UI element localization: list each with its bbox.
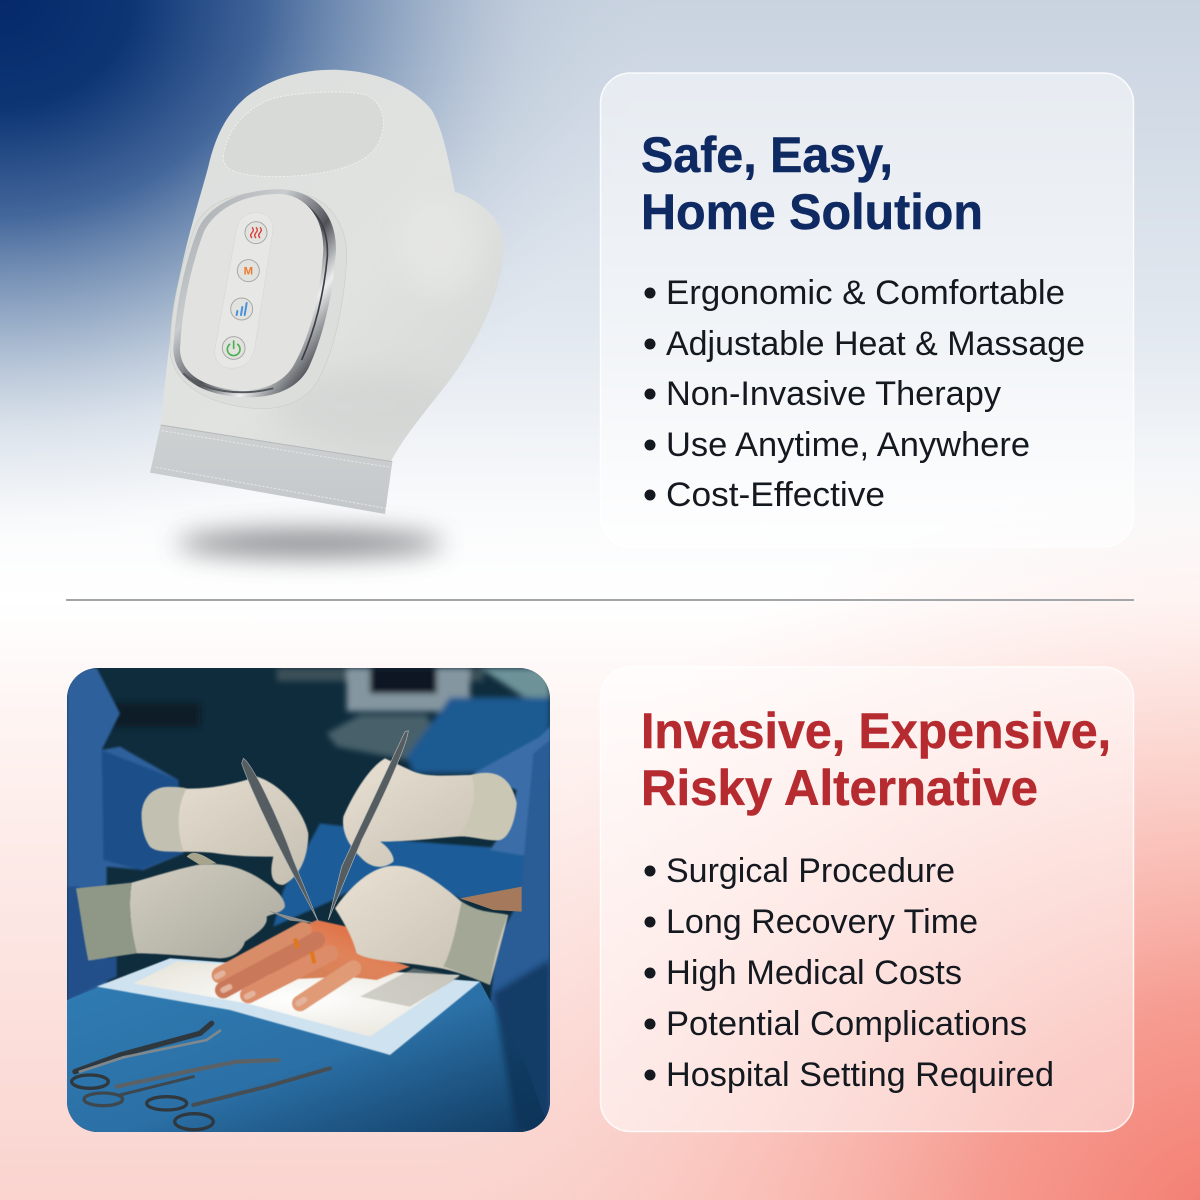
patient hand [217, 920, 410, 1003]
sterile pad [97, 958, 480, 1055]
drawbacks list: Hospital Setting Required [666, 1056, 1054, 1094]
panel: invasive surgery alternative [600, 667, 1134, 1132]
control panel face [180, 194, 323, 390]
upper right hand glove [343, 758, 517, 867]
heading: safe home solution: Safe, Easy, [641, 127, 893, 183]
drawbacks list: Surgical Procedure [666, 852, 955, 890]
benefits list [644, 274, 1085, 514]
control panel housing [170, 192, 347, 409]
patient forearm [460, 887, 522, 912]
panel: safe home solution [600, 73, 1134, 547]
chrome ring [173, 189, 336, 397]
button: mode: M [244, 266, 253, 278]
photo: hand surgery [67, 668, 550, 1132]
drawbacks list [644, 852, 1054, 1094]
button strip [215, 213, 273, 368]
benefits list: Cost-Effective [666, 476, 885, 514]
button: power [222, 337, 245, 359]
heading: invasive alternative: Risky Alternative [641, 760, 1038, 816]
wrist cuff [150, 425, 392, 514]
divider line [66, 599, 1134, 601]
button: level [231, 298, 253, 320]
finger 3 [248, 953, 330, 995]
lower left cuff [76, 883, 137, 961]
heading: invasive alternative [641, 703, 1111, 816]
heading: safe home solution [641, 127, 983, 240]
thumb [300, 968, 353, 1003]
upper left hand glove [142, 777, 308, 885]
glove shading [182, 194, 364, 424]
glove body [161, 70, 504, 463]
benefits list: Adjustable Heat & Massage [666, 325, 1085, 363]
button: mode [237, 260, 259, 282]
lower right cuff [443, 902, 508, 985]
upper right cuff [466, 772, 516, 841]
drawbacks list: High Medical Costs [666, 954, 962, 992]
scalpel [187, 853, 317, 923]
benefits list: Ergonomic & Comfortable [666, 274, 1065, 312]
drawbacks list: Potential Complications [666, 1005, 1027, 1043]
surgeon gowns and drapes [67, 668, 550, 1132]
product: hand massager glove [150, 70, 504, 557]
lower right hand glove [335, 866, 508, 985]
stitched patch [223, 92, 383, 177]
shadow under product [177, 529, 443, 557]
forceps left [242, 758, 318, 922]
button: heat [245, 222, 267, 244]
finger 2 [223, 940, 317, 990]
upper left cuff [142, 787, 187, 852]
heading: safe home solution: Home Solution [641, 184, 983, 240]
table drape [67, 958, 550, 1132]
surgical tools on drape [72, 1023, 330, 1130]
finger 1 [220, 930, 303, 975]
dark lower right shadow [493, 960, 550, 1132]
lower left hand glove [76, 864, 285, 961]
heading: invasive alternative: Invasive, Expensive, [641, 703, 1111, 759]
benefits list: Use Anytime, Anywhere [666, 426, 1030, 464]
benefits list: Non-Invasive Therapy [666, 375, 1001, 413]
drawbacks list: Long Recovery Time [666, 903, 978, 941]
forceps right [328, 731, 408, 920]
operating room background [103, 668, 550, 780]
